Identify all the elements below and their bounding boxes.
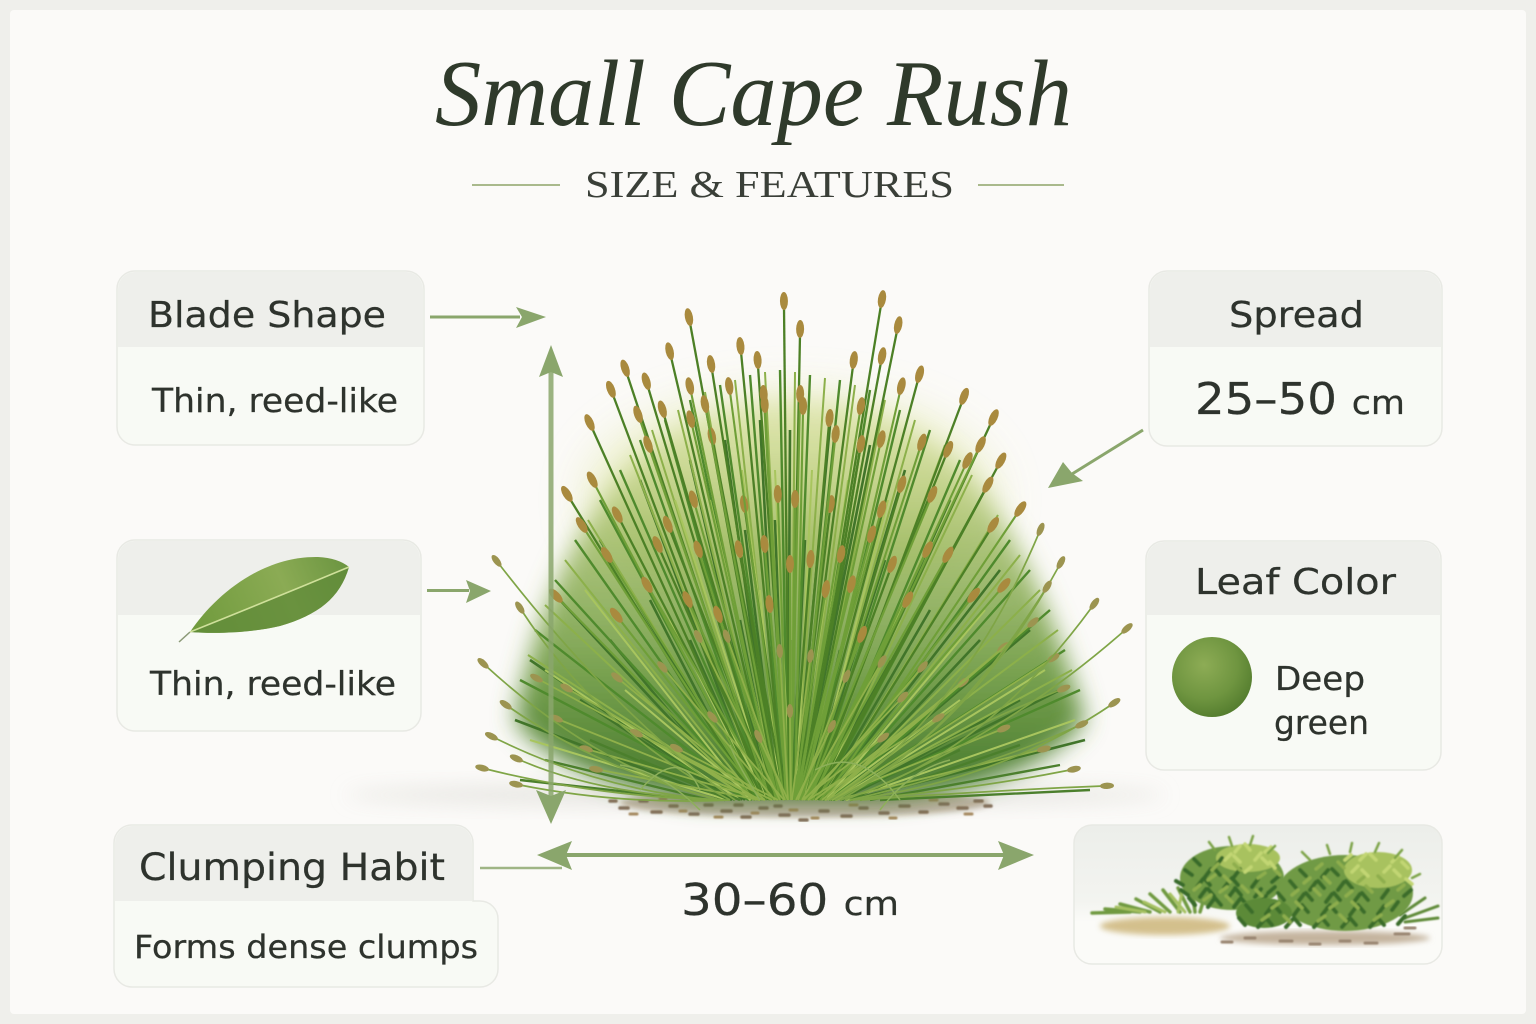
panel: habitat illustration [1074, 825, 1442, 964]
text: leaf value: Thin, reed-like [149, 664, 396, 703]
drooping base stems [620, 745, 950, 810]
soil [1100, 917, 1430, 945]
title: Small Cape Rush [435, 42, 1072, 146]
text: blade shape value: Thin, reed-like [151, 381, 398, 420]
panel: blade shape [117, 271, 424, 445]
yellow glow [590, 400, 990, 600]
arrow: leaf to plant [427, 580, 491, 603]
panel: clumping habit [114, 825, 498, 987]
foliage mass [515, 400, 1085, 800]
connector: clumping habit [480, 867, 562, 869]
heading: clumping habit: Clumping Habit [139, 846, 445, 889]
icon: leaf [179, 557, 349, 642]
mid stems with seed heads [560, 392, 1017, 800]
height arrow [536, 345, 566, 824]
outer wispy stems [486, 533, 1124, 801]
text: clumping habit value: Forms dense clumps [134, 928, 478, 966]
width arrow [537, 841, 1034, 870]
dark stems with seed heads [570, 305, 998, 800]
arrow: blade shape to plant [430, 307, 546, 328]
pale stems with lower seed heads [540, 625, 1050, 800]
panel: leaf color [1146, 541, 1441, 770]
low grass [1092, 886, 1438, 922]
heading: spread: Spread [1229, 295, 1364, 336]
panel: spread [1149, 271, 1442, 446]
gravel [610, 789, 991, 820]
text: spread value: 25–50 cm [1195, 374, 1405, 425]
text: leaf color value: Deep [1275, 659, 1365, 698]
heading: leaf color: Leaf Color [1195, 562, 1396, 603]
panel: leaf [117, 540, 421, 731]
heading: blade shape: Blade Shape [148, 295, 386, 336]
ground shadow [345, 784, 1165, 806]
subtitle with rules: SIZE & FEATURES [585, 164, 954, 206]
shrub left [1176, 836, 1284, 910]
width label: 30–60 cm [681, 875, 899, 926]
arrow: spread to plant [1048, 430, 1143, 488]
text: leaf color value [1274, 659, 1369, 742]
filler stems [515, 370, 1090, 800]
plant illustration [345, 305, 1165, 820]
text: leaf color value: green [1274, 703, 1369, 742]
shrub right [1236, 843, 1420, 931]
icon: colour swatch [1172, 637, 1252, 717]
